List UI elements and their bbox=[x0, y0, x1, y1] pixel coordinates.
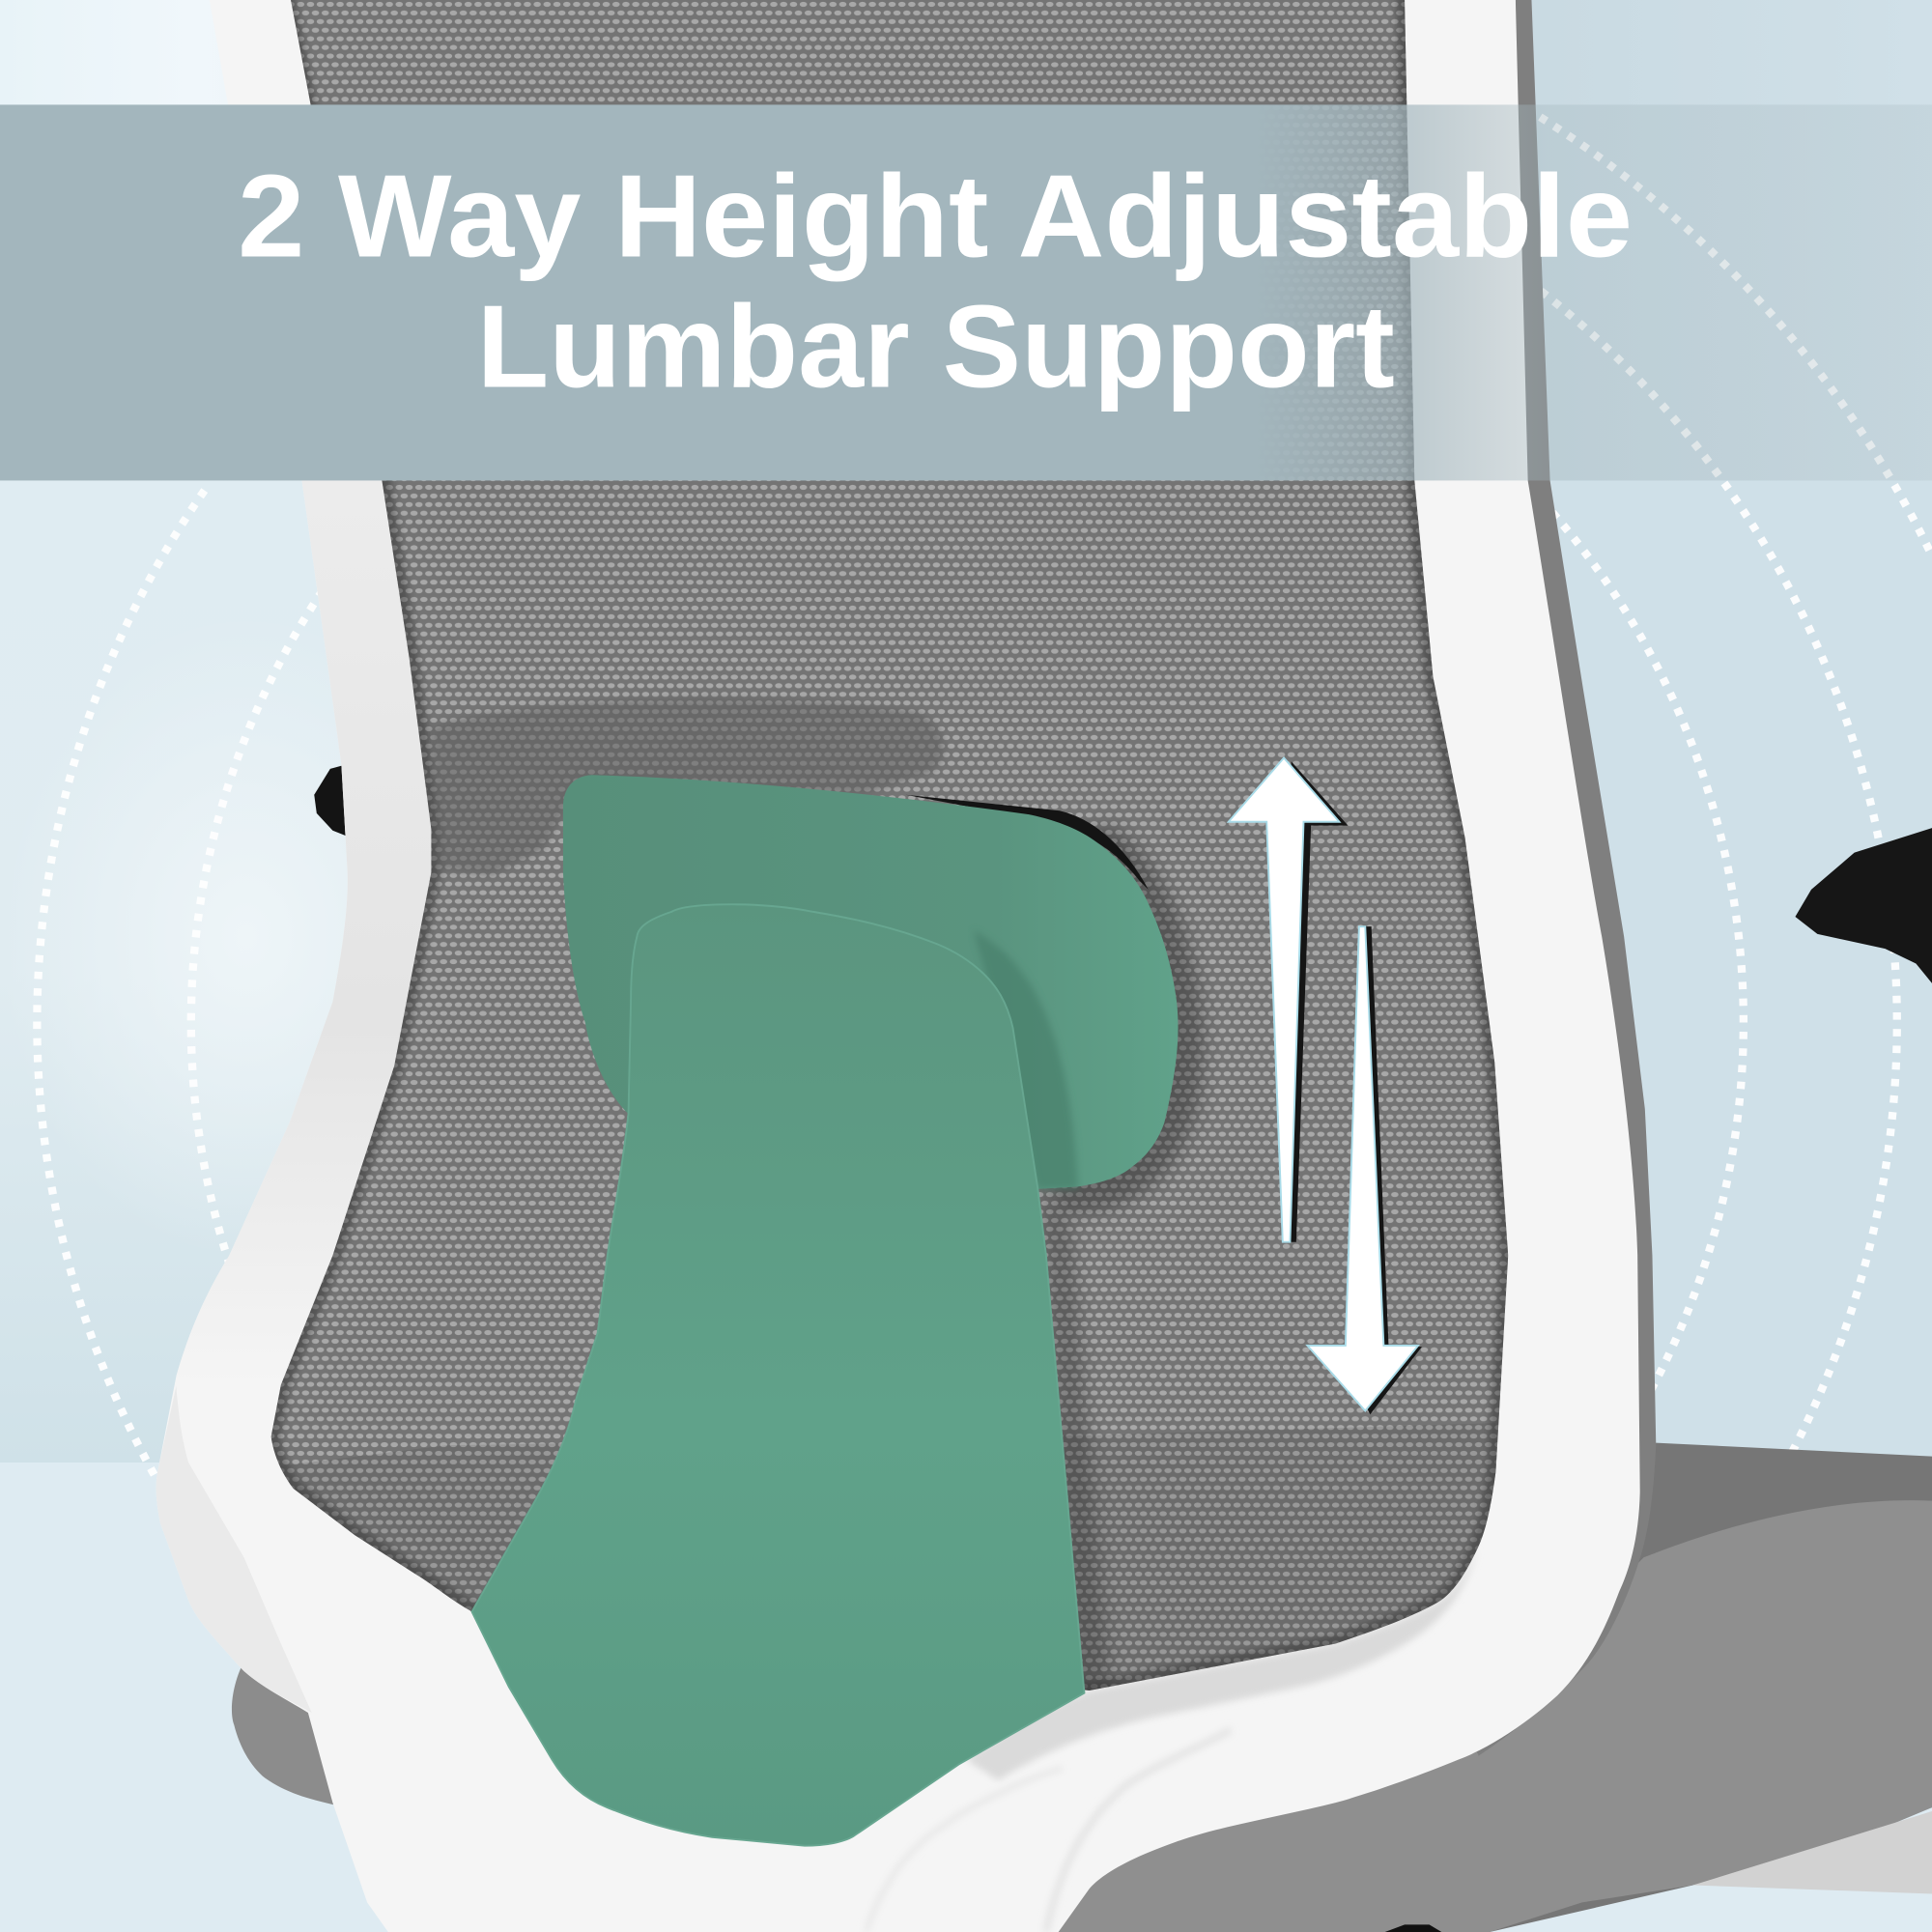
frame lower inner shade bbox=[966, 1548, 1477, 1780]
left armrest bbox=[314, 761, 357, 840]
title: Lumbar Support bbox=[477, 281, 1395, 412]
lower lumbar spine bbox=[472, 904, 1084, 1846]
seat left portion bbox=[232, 1658, 335, 1805]
green lumbar support bbox=[472, 775, 1179, 1846]
base black part bbox=[1385, 1924, 1441, 1932]
mesh shading bbox=[271, 0, 1508, 1713]
frame left shaded strip bbox=[176, 480, 431, 1385]
frame fold bbox=[1046, 1730, 1231, 1932]
upper pad shadow edge bbox=[906, 795, 1149, 890]
icon: up arrow bbox=[1229, 757, 1348, 1242]
pad shadow bbox=[1047, 821, 1211, 1222]
banner band bbox=[0, 104, 1932, 480]
title bbox=[238, 150, 1633, 412]
pad inner shadow bbox=[974, 930, 1078, 1189]
lumbar ghost shadow bbox=[431, 698, 944, 875]
seat back section bbox=[1047, 1443, 1932, 1932]
dotted concentric arcs bbox=[37, 117, 1932, 1485]
seat cushion top bbox=[1047, 1500, 1932, 1932]
lower mesh band bbox=[277, 1423, 1495, 1713]
frame lower left fold bbox=[867, 1768, 1062, 1932]
spine shadow bbox=[1041, 1182, 1109, 1700]
chair back rear edge bbox=[1417, 0, 1656, 1756]
title: 2 Way Height Adjustable bbox=[238, 150, 1633, 281]
frame outer lip bbox=[156, 1386, 312, 1713]
mesh back panel bbox=[271, 0, 1508, 1713]
right armrest bbox=[1795, 828, 1932, 983]
seat cushion bbox=[232, 1443, 1932, 1932]
seat base bbox=[1693, 1811, 1932, 1893]
upper lumbar pad bbox=[563, 775, 1179, 1189]
icon: down arrow bbox=[1307, 926, 1422, 1414]
white chair frame bbox=[156, 0, 1640, 1932]
